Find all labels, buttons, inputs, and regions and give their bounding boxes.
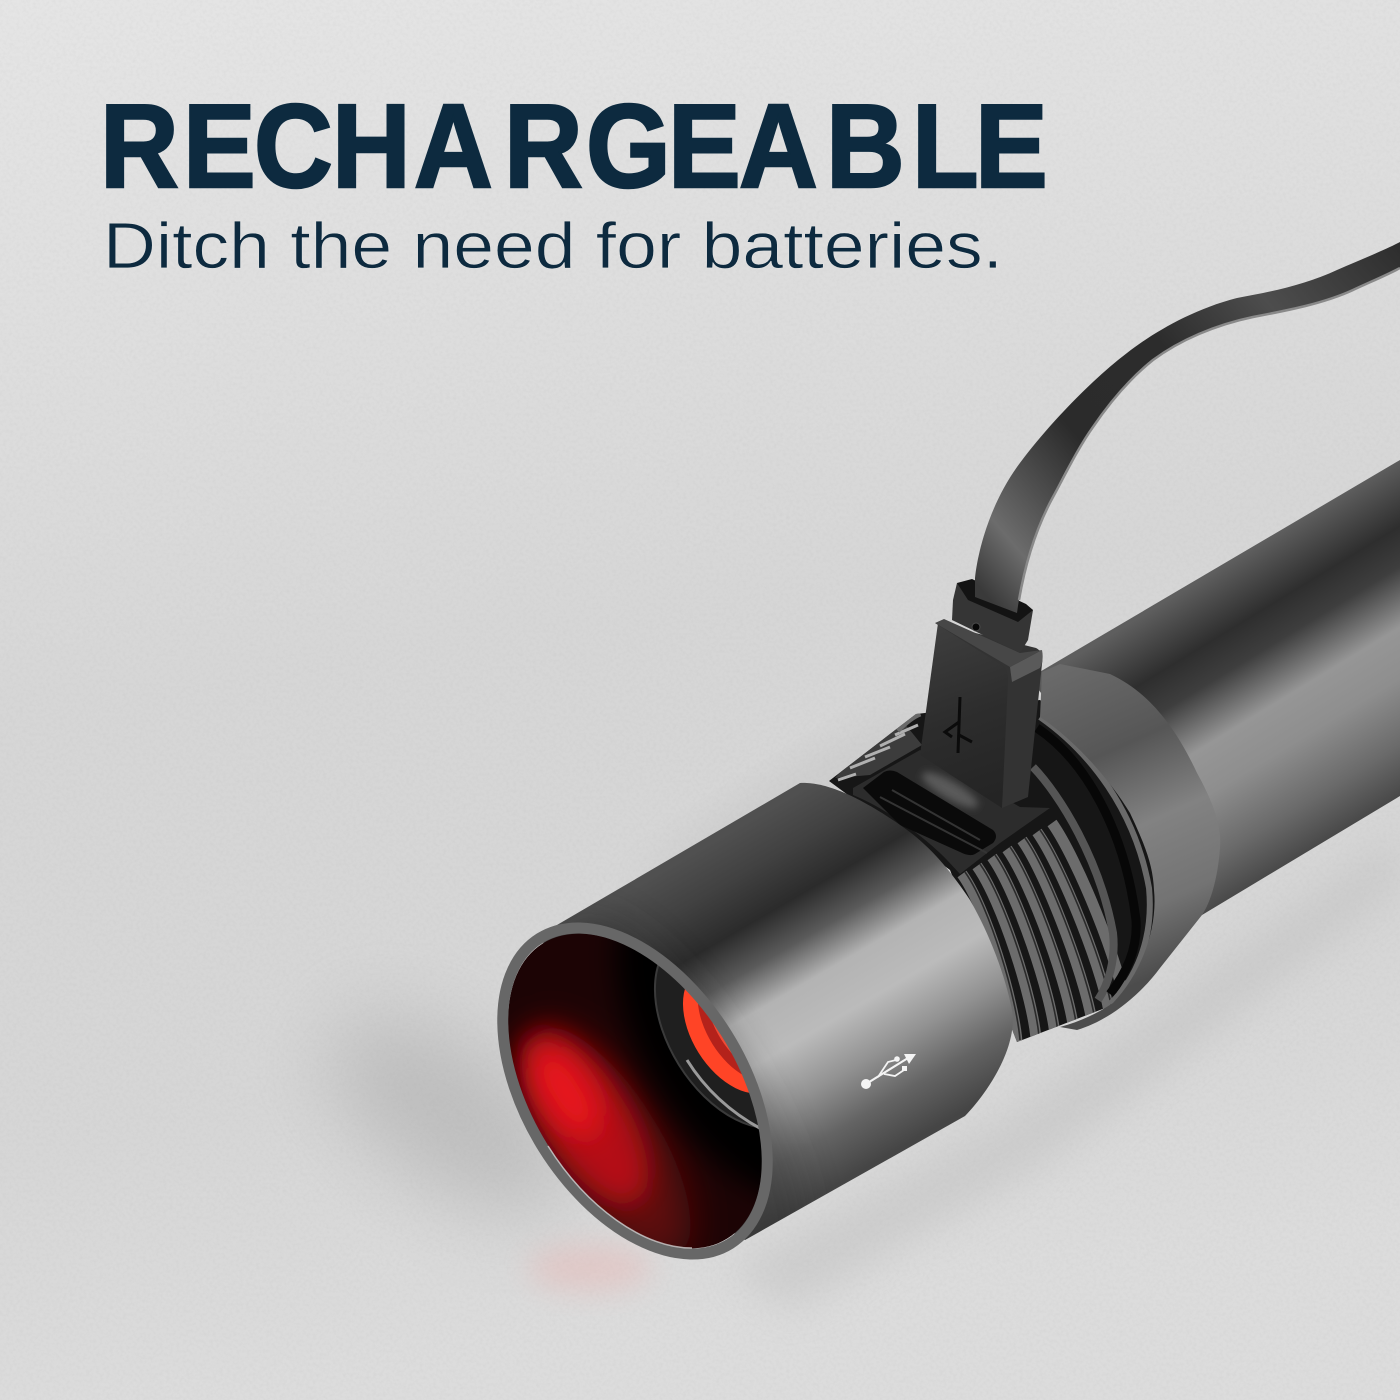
USB logo — [861, 1054, 916, 1089]
red glow — [509, 1008, 711, 1248]
dark interior — [609, 940, 762, 1197]
o-ring grooves — [1033, 767, 1114, 1000]
lens interior — [508, 934, 762, 1248]
flashlight head — [540, 782, 1012, 1240]
flashlight cast shadow — [295, 690, 1400, 1310]
thread groove lines — [965, 830, 1113, 1040]
USB port recess — [863, 770, 996, 855]
thread rings — [962, 823, 1125, 1042]
front rim — [448, 881, 822, 1301]
USB plug — [920, 579, 1043, 808]
title: RECHARGEABLE — [100, 81, 1048, 213]
upper visible thread — [835, 724, 922, 778]
charging cable — [975, 242, 1400, 613]
subtitle: Ditch the need for batteries. — [103, 209, 1003, 282]
glowing lens — [683, 989, 749, 1093]
embossed USB symbol on plug — [945, 697, 972, 753]
collar — [1040, 664, 1220, 1030]
lens housing ring — [654, 965, 758, 1128]
plate highlight — [918, 766, 982, 814]
threaded section — [829, 700, 1170, 1042]
connector plate — [853, 750, 1050, 874]
main barrel — [1030, 460, 1400, 915]
